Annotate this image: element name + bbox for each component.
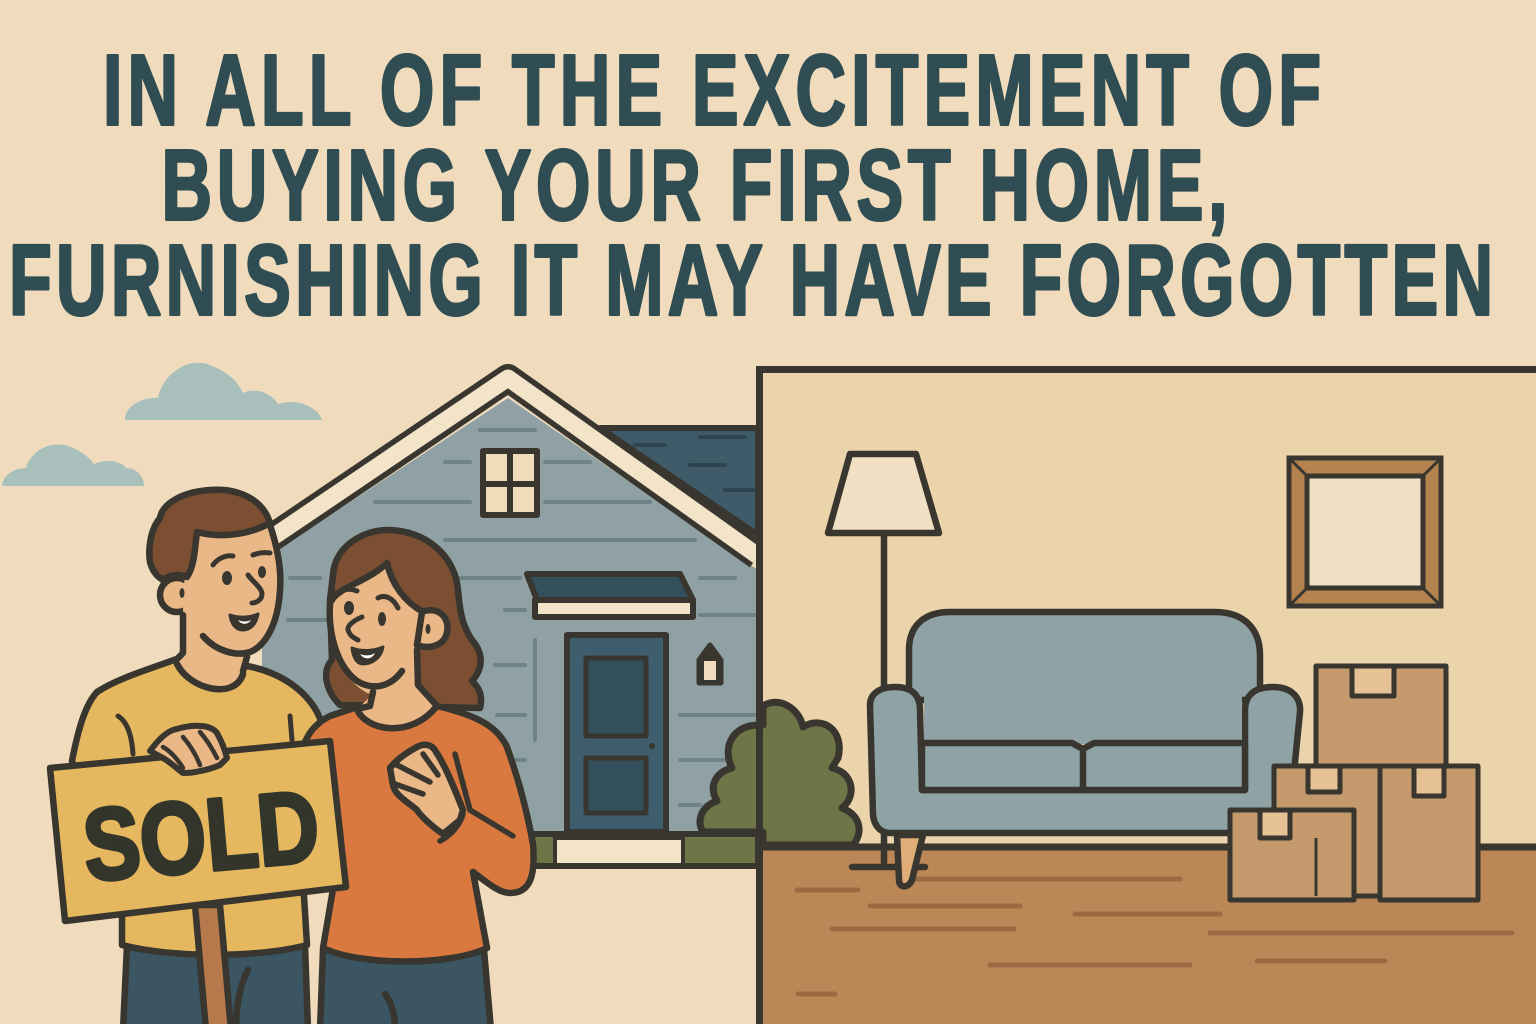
title: FURNISHING IT MAY HAVE FORGOTTEN — [9, 225, 1493, 337]
porch base and lawn — [530, 834, 758, 866]
wall lantern — [699, 645, 721, 683]
woman outlines — [330, 563, 437, 728]
woman fingers and sleeve lines — [395, 754, 513, 841]
sofa leg — [897, 835, 923, 886]
picture frame — [1289, 458, 1441, 606]
man outlines — [177, 525, 280, 689]
roof trim — [270, 378, 758, 556]
house wall — [262, 398, 758, 835]
woman face — [342, 589, 430, 664]
room outline — [760, 370, 1536, 1024]
sofa — [870, 612, 1300, 886]
sofa cushions — [922, 743, 1245, 790]
porch awning — [527, 574, 693, 617]
woman sweater — [305, 706, 534, 962]
floor — [760, 848, 1536, 1024]
dark side roof — [600, 428, 758, 535]
panel: room interior — [760, 370, 1536, 1024]
sign board — [50, 741, 346, 921]
title — [9, 35, 1493, 337]
sofa back — [909, 612, 1260, 700]
woman jeans — [320, 950, 491, 1024]
cloud: upper — [125, 363, 322, 420]
woman — [305, 530, 534, 1024]
man sweater — [72, 659, 330, 955]
moving boxes — [1230, 666, 1478, 900]
man hand — [150, 726, 227, 773]
sign post — [195, 905, 231, 1024]
house — [262, 378, 758, 866]
sofa body — [870, 687, 1300, 833]
cloud: lower — [2, 444, 144, 486]
floor boards — [797, 879, 1512, 994]
floor line — [760, 844, 1536, 850]
man jeans — [123, 945, 308, 1024]
sofa seat fill — [924, 692, 1242, 744]
bush — [700, 700, 859, 1024]
sold sign — [50, 726, 346, 1024]
door — [567, 635, 666, 832]
man fingers — [163, 732, 217, 768]
floor lamp — [828, 454, 939, 867]
woman skin — [330, 563, 437, 728]
title: BUYING YOUR FIRST HOME, — [162, 130, 1228, 242]
man ear — [160, 578, 194, 612]
man face — [180, 553, 270, 630]
woman hair — [326, 530, 481, 708]
title: IN ALL OF THE EXCITEMENT OF — [103, 35, 1321, 147]
man sleeve lines — [118, 716, 292, 754]
man hair — [149, 490, 270, 580]
siding lines — [288, 430, 755, 805]
attic window — [483, 451, 537, 515]
woman hand — [390, 745, 463, 834]
sign text: SOLD — [79, 769, 324, 903]
man skin — [177, 525, 281, 688]
man — [72, 490, 330, 1024]
woman ear — [417, 610, 448, 647]
